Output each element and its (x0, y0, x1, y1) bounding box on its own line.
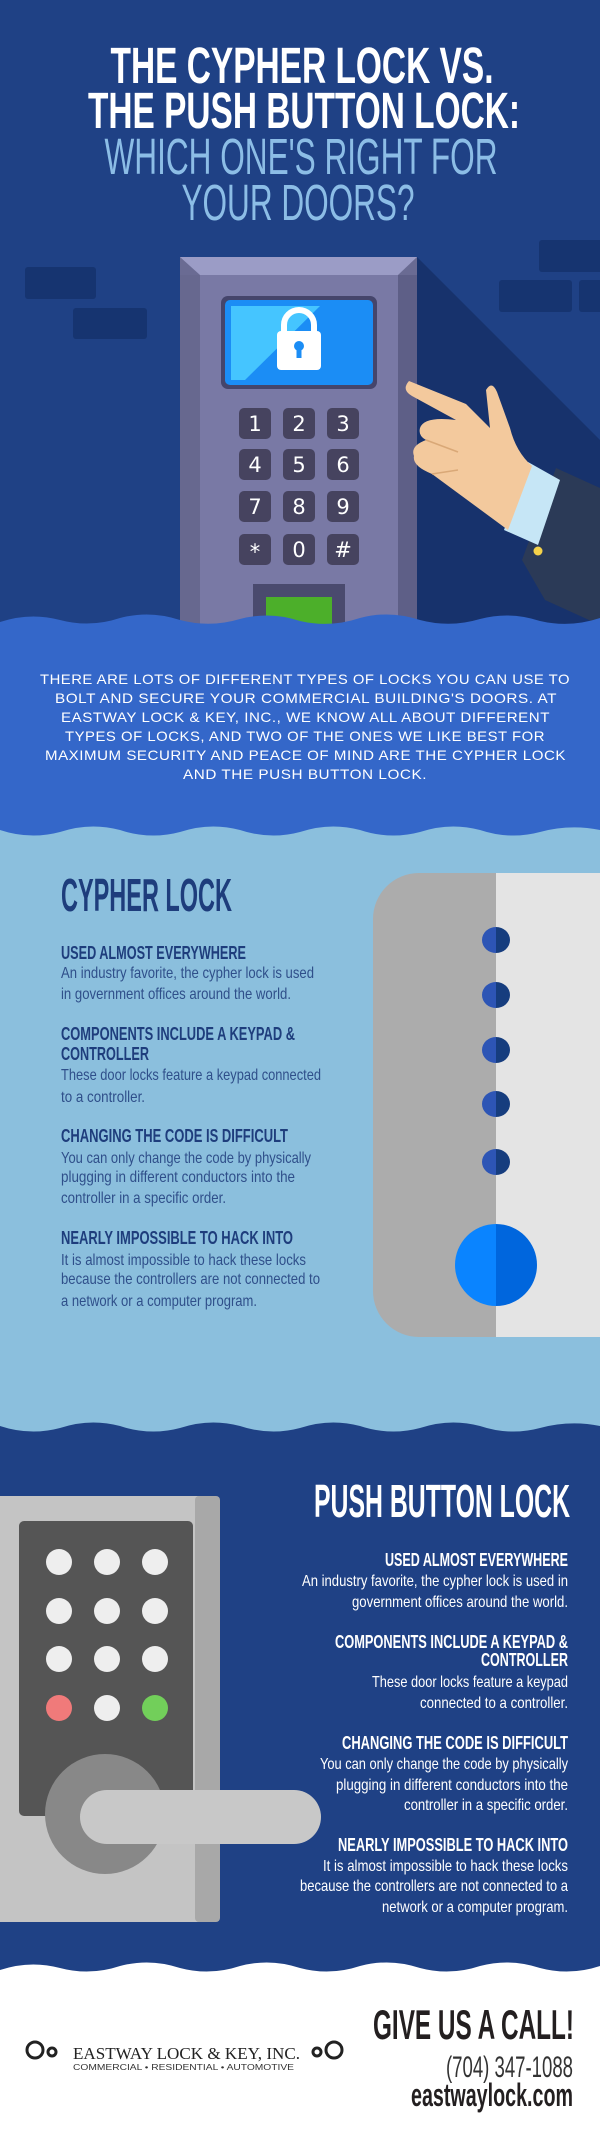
text block: cypher lock features: It is almost impossible to hack these locks (61, 1252, 306, 1269)
text block: push button lock features (300, 1550, 568, 1916)
text block: cypher lock features: USED ALMOST EVERYWHERE (61, 943, 246, 963)
text block: cypher lock features: in government offices around the world. (61, 986, 291, 1003)
text block: cypher lock features: NEARLY IMPOSSIBLE TO HACK INTO (61, 1228, 293, 1248)
intro text: EASTWAY LOCK & KEY, INC., WE KNOW ALL ABOUT DIFFERENT (61, 709, 550, 725)
illustration: cypher keypad device: 6 (336, 453, 350, 477)
heading: cypher lock: CYPHER LOCK (61, 869, 232, 921)
intro text: TYPES OF LOCKS, AND TWO OF THE ONES WE LIKE BEST FOR (65, 728, 545, 744)
panel: footer white (0, 1962, 600, 2137)
illustration: cypher keypad device (180, 257, 417, 629)
shadow of keypad (417, 257, 600, 625)
text block: cypher lock features: You can only change the code by physically (61, 1150, 311, 1167)
intro text: THERE ARE LOTS OF DIFFERENT TYPES OF LOCKS YOU CAN USE TO (40, 671, 570, 687)
illustration: hand pointing (406, 381, 600, 625)
text block: cypher lock features: a network or a computer program. (61, 1293, 257, 1310)
intro text (40, 671, 570, 782)
illustration: push button lock (0, 1496, 321, 1922)
logo: Eastway Lock & Key: COMMERCIAL • RESIDENTIAL • AUTOMOTIVE (73, 2063, 294, 2072)
text block: cypher lock features: An industry favorite, the cypher lock is used (61, 965, 314, 982)
illustration: cypher keypad device: 4 (248, 453, 262, 477)
intro text: AND THE PUSH BUTTON LOCK. (183, 766, 427, 782)
bricks (25, 240, 600, 339)
illustration: cypher keypad device: 9 (336, 495, 350, 519)
text block: cypher lock features: CHANGING THE CODE IS DIFFICULT (61, 1126, 288, 1146)
illustration: cypher keypad device: 5 (292, 453, 306, 477)
illustration: cypher keypad device: # (334, 538, 352, 562)
text block: push button lock features: controller in a specific order. (404, 1797, 568, 1814)
text block: cypher lock features: because the controllers are not connected to (61, 1271, 320, 1288)
illustration: cypher keypad device: 1 (248, 412, 262, 436)
illustration: cypher lock door edge (373, 873, 600, 1337)
title (88, 37, 520, 231)
logo: Eastway Lock & Key (27, 2042, 342, 2072)
screen with padlock (221, 296, 377, 389)
text block: cypher lock features: controller in a specific order. (61, 1190, 226, 1207)
intro text: MAXIMUM SECURITY AND PEACE OF MIND ARE THE CYPHER LOCK (45, 747, 566, 763)
intro text: BOLT AND SECURE YOUR COMMERCIAL BUILDING'S DOORS. AT (55, 690, 557, 706)
text block: cypher lock features: COMPONENTS INCLUDE A KEYPAD & (61, 1024, 295, 1044)
text block: cypher lock features: to a controller. (61, 1089, 145, 1106)
illustration: cypher keypad device: 2 (292, 412, 306, 436)
text block: cypher lock features: plugging in different conductors into the (61, 1169, 295, 1186)
call to action (373, 2001, 574, 2113)
panel: light blue cypher band (0, 820, 600, 1432)
keypad buttons (239, 408, 359, 565)
title: YOUR DOORS? (182, 174, 414, 231)
illustration: cypher keypad device: 8 (292, 495, 306, 519)
illustration: cypher keypad device: 7 (248, 495, 262, 519)
illustration: cypher keypad device: 0 (292, 538, 306, 562)
text block: push button lock features: connected to a controller. (420, 1695, 568, 1712)
text block: cypher lock features: These door locks feature a keypad connected (61, 1067, 321, 1084)
illustration: cypher keypad device: * (250, 540, 260, 564)
text block: cypher lock features: CONTROLLER (61, 1044, 149, 1064)
panel: intro band (0, 614, 600, 836)
logo: Eastway Lock & Key: EASTWAY LOCK & KEY, INC. (73, 2044, 300, 2063)
illustration: cypher keypad device: 3 (336, 412, 350, 436)
text block: cypher lock features (61, 943, 321, 1310)
